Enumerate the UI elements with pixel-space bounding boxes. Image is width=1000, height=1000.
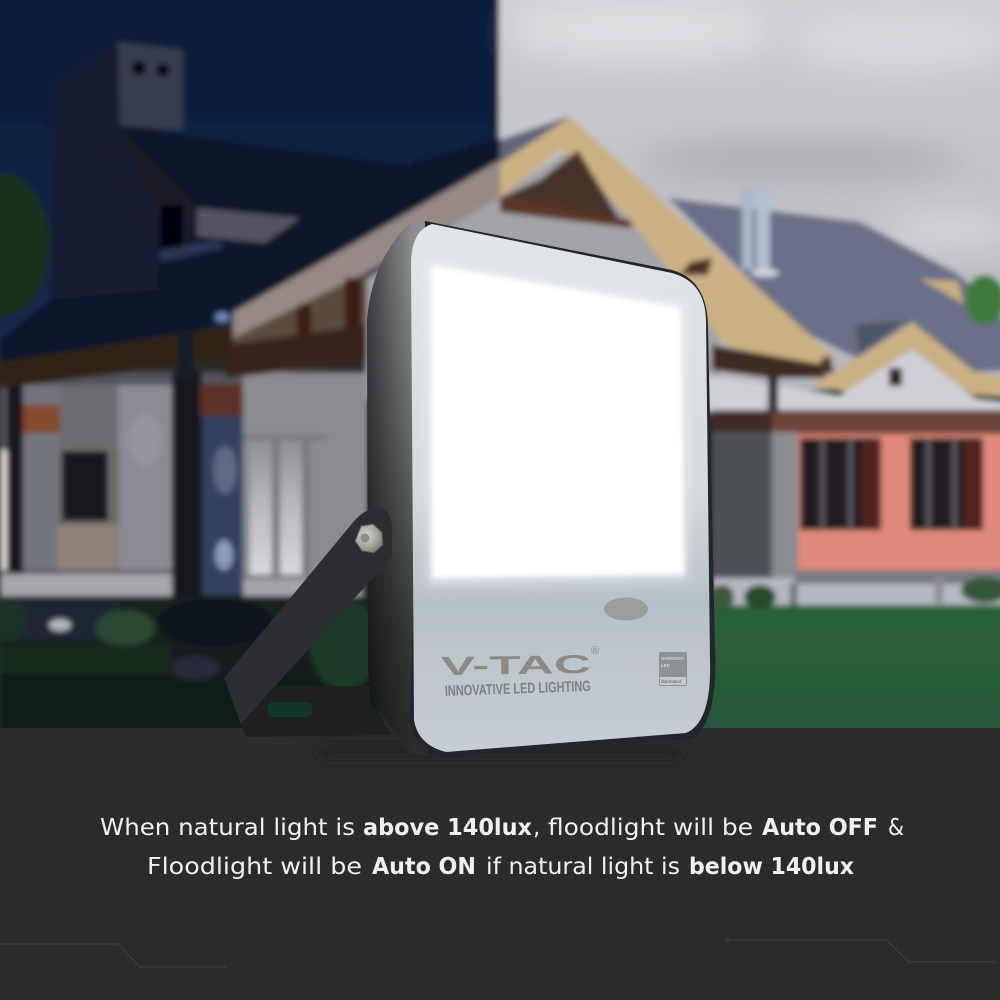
frame edge	[410, 221, 715, 757]
caption line 1	[100, 815, 904, 841]
upper bracket arm	[224, 508, 392, 724]
night sky	[0, 0, 499, 350]
LED panel white	[432, 266, 684, 578]
fixture shadow on floor	[320, 744, 680, 758]
porch floor	[0, 574, 363, 600]
left pillar	[172, 372, 246, 597]
day walls	[705, 350, 1000, 609]
Samsung LED badge: illuminated	[661, 679, 682, 684]
caption line 2: below 140lux	[689, 854, 854, 880]
bracket bolt	[355, 524, 383, 553]
tree at far left	[0, 173, 49, 317]
floodlight product	[224, 221, 715, 757]
caption line 1: &	[888, 815, 904, 841]
registered mark: ®	[591, 645, 599, 657]
left stone wall	[0, 372, 368, 577]
night roof and dormer	[0, 128, 500, 362]
caption text	[100, 815, 904, 880]
lens face	[411, 224, 710, 752]
right stone wall and bright window	[243, 372, 368, 577]
light glow	[428, 262, 688, 586]
caption line 1: When natural light is	[100, 815, 355, 841]
caption line 1: Auto OFF	[762, 815, 878, 841]
caption line 1: ,	[533, 815, 540, 841]
V-TAC logo	[441, 645, 599, 700]
decorative circuit line right	[724, 937, 995, 962]
chimney	[50, 42, 183, 320]
night lawn and bushes	[0, 596, 380, 732]
night eaves and fascia	[0, 160, 500, 388]
logo tagline: INNOVATIVE LED LIGHTING	[445, 678, 591, 700]
caption line 2: if natural light is	[486, 854, 680, 880]
caption line 1: above 140lux	[363, 815, 532, 841]
caption line 2: Floodlight will be	[147, 854, 362, 880]
motion sensor	[604, 598, 648, 620]
decorative circuit line left	[0, 944, 226, 967]
photo background: house split night and day	[0, 0, 1000, 732]
Samsung LED badge: LED	[661, 663, 671, 668]
day grey roof	[500, 116, 1000, 372]
wall under gable	[365, 150, 720, 400]
Samsung LED badge: SAMSUNG	[661, 656, 685, 661]
logo text: V-TAC	[441, 649, 591, 681]
caption line 2: Auto ON	[372, 854, 476, 880]
day lawn	[700, 604, 1000, 732]
caption line 1: floodlight will be	[548, 815, 753, 841]
dark footer panel	[0, 728, 1000, 1000]
Samsung LED badge	[659, 652, 687, 686]
day gable fascia	[500, 117, 1000, 412]
housing side	[367, 221, 428, 755]
lower mounting bracket	[241, 686, 392, 737]
caption line 2	[147, 854, 854, 880]
day sky with clouds	[499, 0, 1000, 390]
